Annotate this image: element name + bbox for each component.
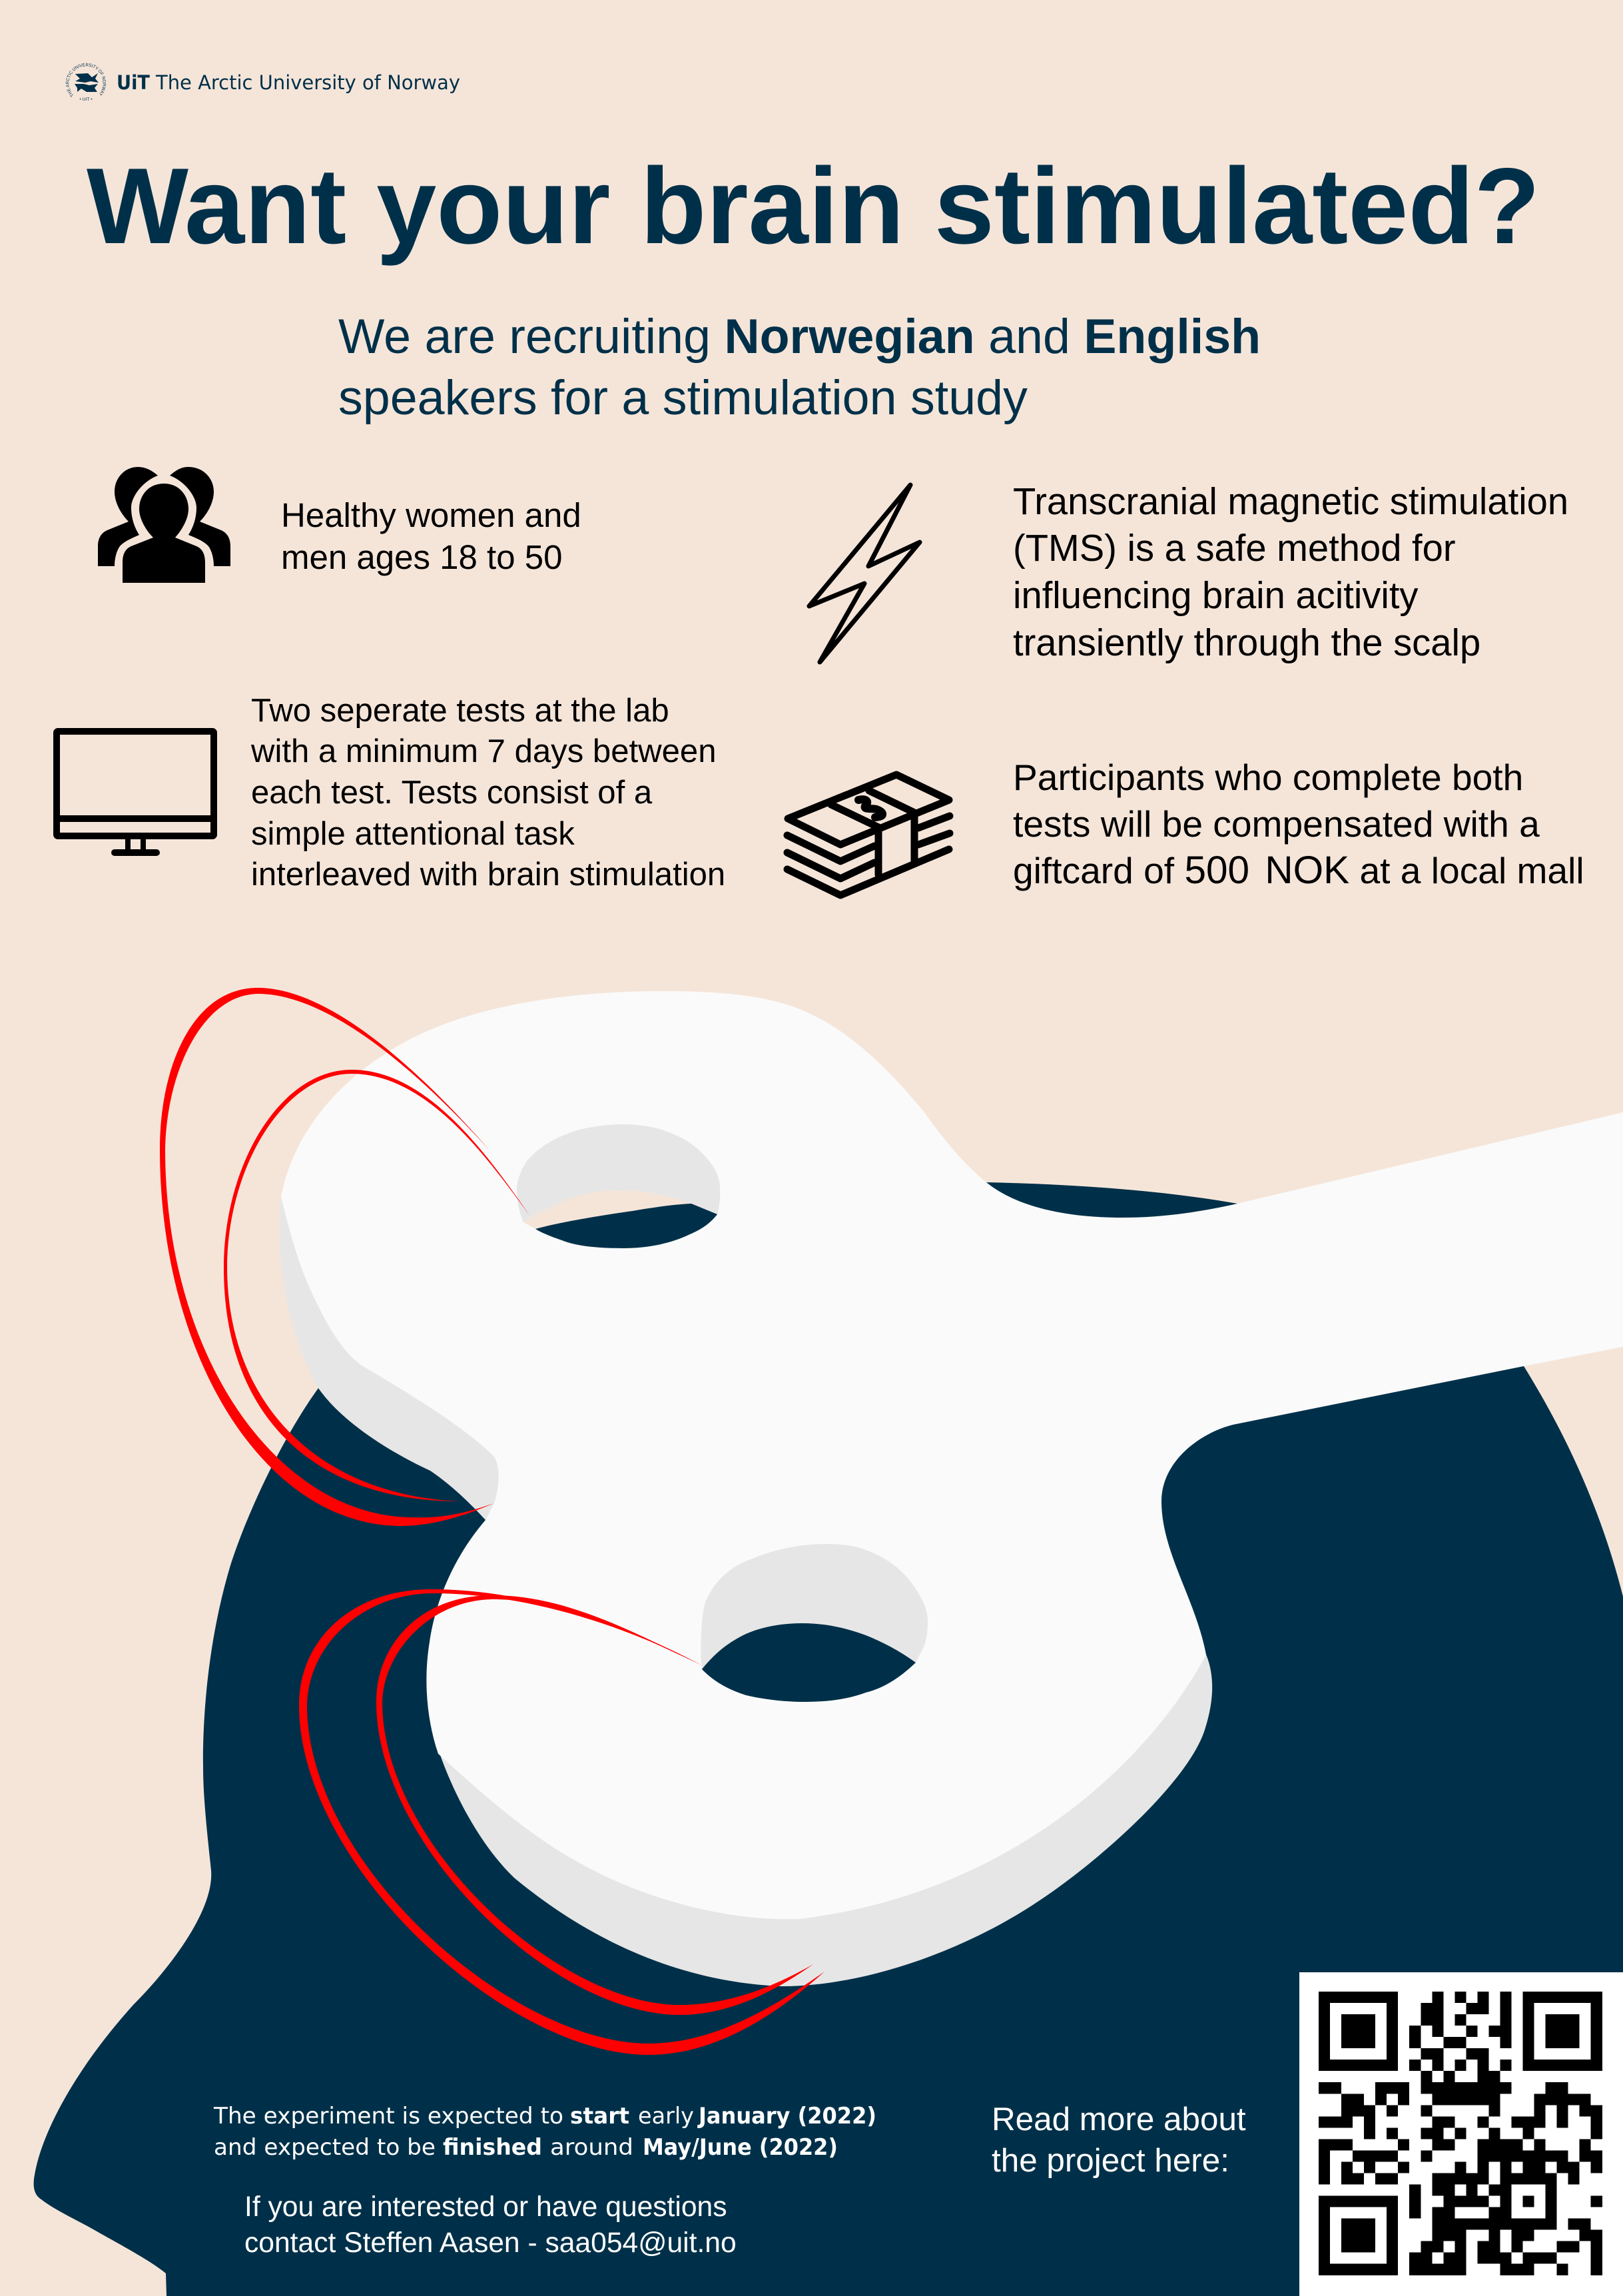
text: participants: [281, 496, 581, 576]
subtitle: [338, 308, 1261, 425]
text: TMS description: Transcranial magnetic stimulation: [1013, 480, 1568, 522]
text: TMS description: (TMS) is a safe method for: [1013, 527, 1456, 569]
QR code: [1299, 1972, 1623, 2296]
text: test procedure: each test. Tests consist of a: [251, 775, 653, 811]
brain coil illustration: [279, 991, 1623, 1986]
title: Want your brain stimulated?: [87, 146, 1540, 266]
text: timeline: May/June (2022): [643, 2134, 838, 2161]
icon: lightning bolt: [809, 485, 920, 662]
text: test procedure: interleaved with brain stimulation: [251, 857, 725, 893]
logo wordmark: The Arctic University of Norway: [155, 71, 460, 94]
logo wordmark: UiT: [117, 71, 150, 94]
text: contact: contact Steffen Aasen - saa054@uit.no: [244, 2227, 737, 2259]
red magnetic field arcs: lower: [299, 1589, 824, 2055]
text: compensation: [1013, 757, 1584, 892]
text: test procedure: with a minimum 7 days between: [250, 733, 717, 769]
text: timeline: January (2022): [697, 2103, 876, 2129]
icon: people: [98, 467, 230, 583]
red magnetic field arcs: upper: [160, 988, 530, 1526]
text: read more: [992, 2101, 1246, 2179]
text: compensation: tests will be compensated with a: [1013, 803, 1540, 845]
text: contact: If you are interested or have questions: [244, 2191, 727, 2223]
text: contact: [244, 2191, 737, 2259]
text: test procedure: Two seperate tests at the lab: [251, 693, 669, 729]
text: TMS description: transiently through the scalp: [1013, 621, 1480, 663]
text: timeline: [213, 2103, 876, 2161]
icon: monitor: [57, 731, 214, 853]
lower coil hole: [701, 1544, 928, 1702]
text: timeline: and expected to be: [214, 2134, 436, 2161]
text: timeline: The experiment is expected to: [213, 2103, 563, 2129]
text: test procedure: [250, 693, 725, 893]
text: TMS description: influencing brain acitivity: [1013, 574, 1419, 616]
coil side shading: left: [279, 1197, 506, 1520]
icon: UiT seal: • UIT •: [79, 97, 93, 102]
text: compensation: giftcard of 500 NOK at a local mall: [1013, 849, 1584, 892]
navy background blob: [34, 1182, 1623, 2296]
text: timeline: around: [550, 2134, 633, 2161]
subtitle: We are recruiting Norwegian and English: [338, 308, 1261, 364]
text: compensation: Participants who complete both: [1013, 757, 1523, 798]
coil side shading: bottom: [433, 1655, 1212, 1986]
text: timeline: finished: [443, 2134, 542, 2161]
text: participants: Healthy women and: [281, 496, 581, 534]
coil top face: [281, 991, 1623, 1919]
upper coil hole: [517, 1124, 720, 1248]
text: timeline: early: [638, 2103, 694, 2129]
text: participants: men ages 18 to 50: [281, 538, 562, 576]
text: read more: Read more about: [992, 2101, 1246, 2137]
text: read more: the project here:: [992, 2142, 1229, 2179]
text: test procedure: simple attentional task: [251, 816, 575, 852]
icon: stack of money: [787, 775, 950, 895]
text: timeline: start: [570, 2103, 629, 2129]
subtitle: speakers for a stimulation study: [338, 370, 1028, 425]
text: TMS description: [1013, 480, 1568, 663]
UiT logo: [65, 63, 460, 102]
icon: UiT seal: THE ARCTIC UNIVERSITY OF NORWAY: [65, 63, 107, 97]
